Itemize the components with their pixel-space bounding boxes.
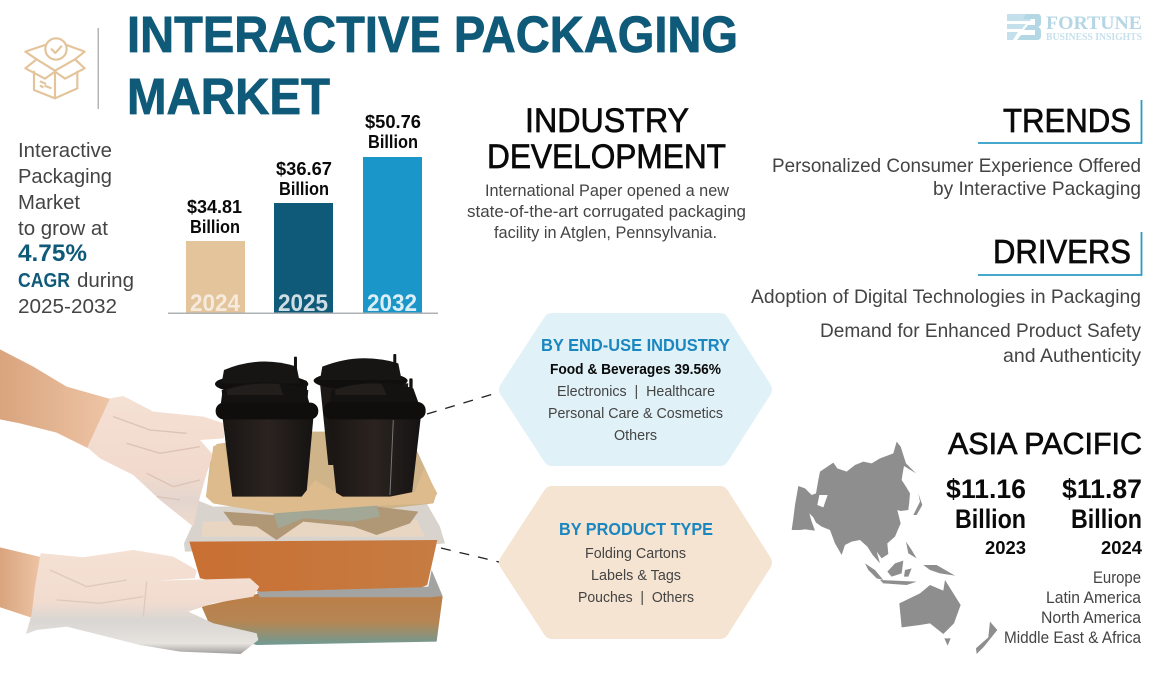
bar: 2032: 2032 bbox=[367, 290, 417, 317]
other regions: Middle East & Africa bbox=[1004, 629, 1142, 647]
trends panel: Personalized Consumer Experience Offered bbox=[772, 155, 1141, 177]
bar: 2032: Billion bbox=[368, 132, 418, 152]
drink carrier tray bbox=[206, 432, 437, 540]
bar: 2024: 2024 bbox=[190, 290, 241, 317]
panel: by end-use industry: Others bbox=[614, 427, 657, 444]
value: 2023 bbox=[946, 474, 1026, 558]
panel: by end-use industry: Personal Care & Cosmetics bbox=[548, 405, 723, 422]
industry development text: facility in Atglen, Pennsylvania. bbox=[494, 224, 717, 242]
photo: gloved hands holding coffee cups and food boxes bbox=[0, 349, 445, 654]
bar: 2024: Billion bbox=[190, 217, 240, 237]
CAGR text block: 4.75% bbox=[18, 240, 87, 267]
panel: by end-use industry: Electronics | Healthcare bbox=[557, 383, 715, 400]
other regions: North America bbox=[1041, 609, 1142, 627]
industry development text: state-of-the-art corrugated packaging bbox=[467, 203, 746, 221]
panel: by product type: Labels & Tags bbox=[591, 567, 681, 584]
dashed connector: end-use industry bbox=[427, 392, 500, 414]
lower glove bbox=[26, 550, 259, 654]
CAGR text block: CAGR bbox=[18, 270, 70, 292]
drivers panel: Adoption of Digital Technologies in Packaging bbox=[751, 286, 1141, 308]
lower arm bbox=[0, 547, 42, 618]
asia pacific panel: ASIA PACIFIC bbox=[948, 426, 1142, 461]
logo: Fortune Business Insights bbox=[1007, 13, 1142, 43]
bar: 2025: Billion bbox=[279, 179, 329, 199]
front left cup bbox=[216, 381, 318, 500]
industry development heading: INDUSTRY bbox=[525, 102, 689, 140]
panel: by product type: Folding Cartons bbox=[585, 545, 686, 562]
bar: 2032: $50.76 bbox=[365, 112, 421, 132]
panel: by end-use industry: BY END-USE INDUSTRY bbox=[541, 335, 730, 355]
CAGR text block: Packaging bbox=[18, 166, 112, 188]
tray front rim bbox=[206, 443, 437, 513]
trends panel: TRENDS bbox=[1003, 102, 1131, 139]
other regions: Europe bbox=[1093, 569, 1141, 587]
CAGR text block bbox=[18, 140, 134, 318]
industry development text: International Paper opened a new bbox=[485, 182, 729, 200]
panel: by product type: BY PRODUCT TYPE bbox=[559, 519, 713, 539]
industry development text bbox=[467, 182, 746, 242]
drivers panel: DRIVERS bbox=[993, 233, 1131, 270]
bar: 2024 bbox=[186, 197, 245, 317]
title bbox=[127, 6, 738, 125]
trends panel bbox=[772, 100, 1142, 200]
title: INTERACTIVE PACKAGING bbox=[127, 6, 738, 63]
value: 2023: 2023 bbox=[985, 538, 1026, 558]
map: Asia Pacific bbox=[792, 442, 997, 654]
value: 2023: Billion bbox=[955, 504, 1026, 534]
panel: by end-use industry: Food & Beverages 39.56% bbox=[550, 362, 721, 378]
drivers panel: and Authenticity bbox=[1003, 345, 1141, 367]
bar: 2025: $36.67 bbox=[276, 159, 332, 179]
CAGR text block: to grow at bbox=[18, 218, 108, 240]
upper glove bbox=[87, 396, 224, 527]
upper food box bbox=[189, 540, 437, 592]
back left cup bbox=[215, 357, 308, 473]
back right cup bbox=[314, 354, 408, 465]
panel: by product type: Pouches | Others bbox=[578, 589, 694, 606]
bar: 2025: 2025 bbox=[278, 290, 328, 317]
asia pacific panel bbox=[946, 426, 1142, 647]
bar: 2025 bbox=[274, 159, 333, 317]
value: 2024: Billion bbox=[1071, 504, 1142, 534]
bar: 2032 bbox=[363, 112, 422, 317]
trends panel: by Interactive Packaging bbox=[933, 178, 1141, 200]
title divider bbox=[98, 28, 99, 109]
CAGR text block: 2025-2032 bbox=[18, 296, 117, 318]
logo: Fortune Business Insights: BUSINESS INSIGHTS bbox=[1046, 32, 1142, 43]
industry development heading bbox=[487, 102, 726, 176]
bar: 2024: $34.81 bbox=[187, 197, 242, 217]
bar chart bbox=[168, 112, 438, 317]
CAGR text block: during bbox=[77, 270, 134, 292]
panel: by product type bbox=[508, 495, 763, 630]
panel: by end-use industry bbox=[508, 322, 763, 457]
drivers panel: Demand for Enhanced Product Safety bbox=[820, 320, 1141, 342]
logo: Fortune Business Insights: FORTUNE bbox=[1046, 13, 1142, 34]
upper arm bbox=[0, 349, 112, 448]
title: MARKET bbox=[127, 68, 330, 125]
icon: open box with check mark bbox=[25, 38, 85, 98]
lower food box bbox=[202, 570, 443, 645]
value: 2023: $11.16 bbox=[946, 474, 1026, 504]
drivers panel bbox=[751, 232, 1142, 367]
front right cup bbox=[323, 378, 426, 497]
value: 2024: $11.87 bbox=[1062, 474, 1142, 504]
value: 2024 bbox=[1062, 474, 1142, 558]
industry development heading: DEVELOPMENT bbox=[487, 138, 726, 176]
dashed connector: product type bbox=[441, 548, 499, 562]
other regions bbox=[1004, 569, 1142, 647]
CAGR text block: Market bbox=[18, 192, 80, 214]
other regions: Latin America bbox=[1046, 589, 1142, 607]
value: 2024: 2024 bbox=[1101, 538, 1142, 558]
CAGR text block: Interactive bbox=[18, 140, 112, 162]
clear lid of upper box bbox=[184, 500, 445, 552]
